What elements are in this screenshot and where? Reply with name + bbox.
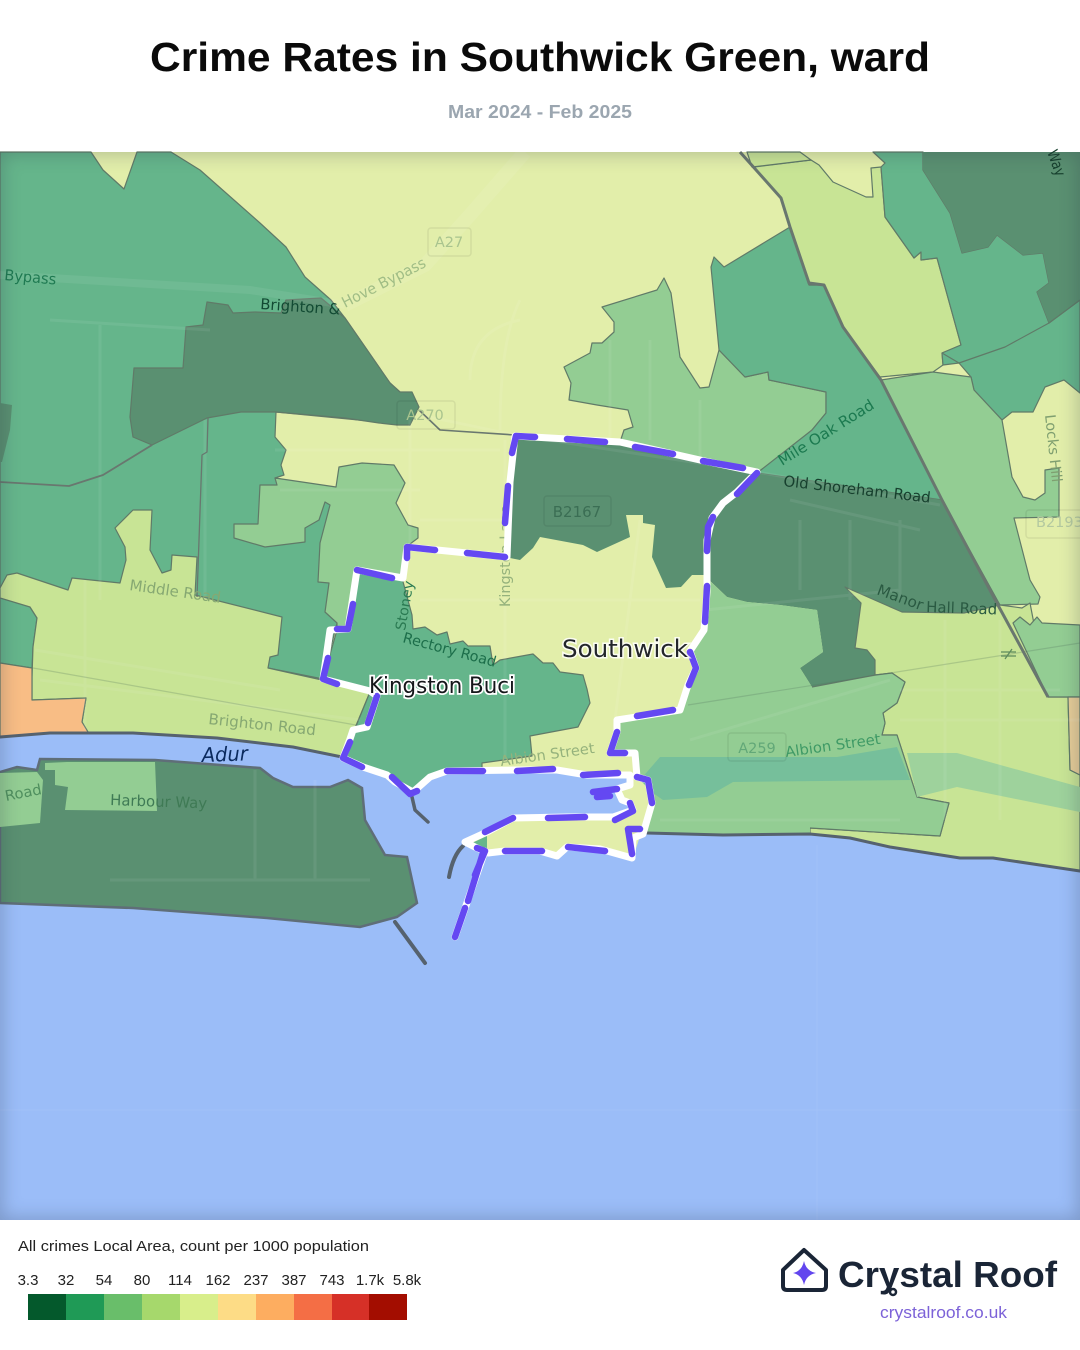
canal water: [640, 747, 910, 800]
ward boundary: white base line: [323, 436, 757, 937]
road label: B2167: B2167: [553, 503, 601, 521]
road label: Road: Road: [4, 782, 43, 805]
region: south-east yellow-green: [810, 587, 1080, 871]
brand name: Crystal Roof: [838, 1254, 1058, 1295]
region: central east light green: [881, 372, 1059, 605]
road label: A27: [428, 228, 471, 256]
legend tick labels: 3.3: [18, 1272, 38, 1289]
legend tick labels: 743: [319, 1272, 345, 1289]
road label: Brighton & Hove Bypass: Brighton &: [260, 295, 341, 319]
region: Kingston Buci medium green: [323, 570, 590, 792]
region: west medium green: [0, 152, 410, 679]
region: Middle Road yellow-green: [0, 510, 370, 757]
road label: Manor Hall Road: Manor: [875, 581, 927, 614]
ward boundary: purple dashes: [323, 436, 757, 937]
legend tick labels: 237: [243, 1272, 269, 1289]
water label: Adur: Adur: [199, 741, 250, 767]
Crystal Roof logo: [783, 1250, 1058, 1322]
road label: Rectory Road: Rectory Road: [401, 630, 498, 671]
region: north-east medium green: [873, 152, 1080, 420]
place label: Kingston Buci: Kingston Buci: [369, 674, 515, 699]
legend tick labels: 387: [281, 1272, 307, 1289]
legend tick labels: 32: [58, 1272, 74, 1289]
region: light green west of ward: [234, 463, 418, 632]
road label: Old Shoreham Road: Old Shoreham Road: [783, 472, 932, 507]
railway station symbol: [1001, 649, 1016, 659]
road label: Manor Hall Road: Hall Road: [926, 598, 997, 618]
title: Crime Rates in Southwick Green, ward: [150, 34, 930, 80]
road label: A259: A259: [738, 741, 776, 757]
road label: Albion Street east: Albion Street: [784, 732, 882, 761]
road label: A270: [397, 401, 455, 429]
website url: crystalroof.co.uk: [880, 1304, 1008, 1322]
canal water east: [907, 753, 1080, 812]
region: Old Shoreham dark green: [707, 473, 999, 687]
rail line: [33, 643, 1080, 727]
region: north light green: [564, 278, 826, 473]
legend tick labels: 5.8k: [393, 1272, 422, 1289]
legend tick labels: 1.7k: [356, 1272, 385, 1289]
sea: [0, 152, 1080, 1220]
legend tick labels: 114: [168, 1272, 192, 1289]
road label: Brighton & Hove Bypass: Hove Bypass: [339, 254, 429, 312]
road label: Albion Street west: Albion Street: [499, 741, 596, 770]
region: north-east of ward medium green: [711, 227, 942, 500]
choropleth map: [0, 147, 1080, 1220]
legend tick labels: [18, 1272, 422, 1289]
road label: Brighton & Hove Bypass: [260, 254, 429, 319]
road label: Way: Way: [1043, 147, 1069, 179]
small green patch at harbour: [472, 836, 487, 851]
ward boundary: [323, 436, 757, 937]
legend: [18, 1238, 422, 1320]
road label: Brighton Road: Brighton Road: [208, 710, 317, 739]
legend tick labels: 80: [134, 1272, 150, 1289]
road label: A27: A27: [435, 235, 463, 251]
region: north-east yellow-green: [754, 160, 961, 377]
region: north-east dark green: [923, 152, 1080, 323]
road label: Mile Oak Road: Mile Oak Road: [775, 396, 877, 469]
region: orange high-crime area: [0, 663, 88, 737]
road label: Stoney: Stoney: [393, 580, 418, 632]
region: Harbour Way light green: [45, 762, 157, 811]
subtitle: date range: Mar 2024 - Feb 2025: [448, 101, 632, 122]
faint roads: [0, 152, 1080, 880]
road label: Locks Hill: Locks Hill: [1041, 414, 1064, 483]
road label: Middle Road: Middle Road: [128, 576, 222, 607]
legend title: All crimes Local Area, count per 1000 population: [18, 1238, 369, 1255]
road label: Harbour Way: Harbour Way: [110, 791, 208, 812]
road label: Manor Hall Road: [875, 581, 997, 618]
region: east edge tan: [1068, 697, 1080, 775]
legend tick labels: 162: [205, 1272, 231, 1289]
road label: B2167: [544, 496, 611, 526]
road label: Kingston Lane: Kingston Lane: [498, 505, 514, 607]
road label: B2193: [1026, 510, 1080, 538]
icon: y tail dot: [890, 1289, 896, 1295]
legend colour scale: [28, 1294, 407, 1320]
legend tick labels: 54: [96, 1272, 112, 1289]
railway boundary lines: [0, 152, 1048, 697]
land base: [0, 152, 1080, 871]
region: ward north dark green: [510, 436, 757, 588]
coastline and piers: [0, 733, 1080, 963]
region: east edge light green: [1013, 617, 1080, 697]
icon: house with star: [783, 1250, 826, 1290]
road label: A270: A270: [406, 408, 444, 424]
region: north-west dark green: [130, 298, 419, 445]
region: Southwick south light green: [610, 578, 949, 836]
road label: Bypass: Bypass: [4, 266, 57, 289]
place label: Southwick: Southwick: [562, 635, 688, 663]
road label: A259: [728, 733, 786, 761]
region: Shoreham south-west dark green: [0, 759, 417, 927]
